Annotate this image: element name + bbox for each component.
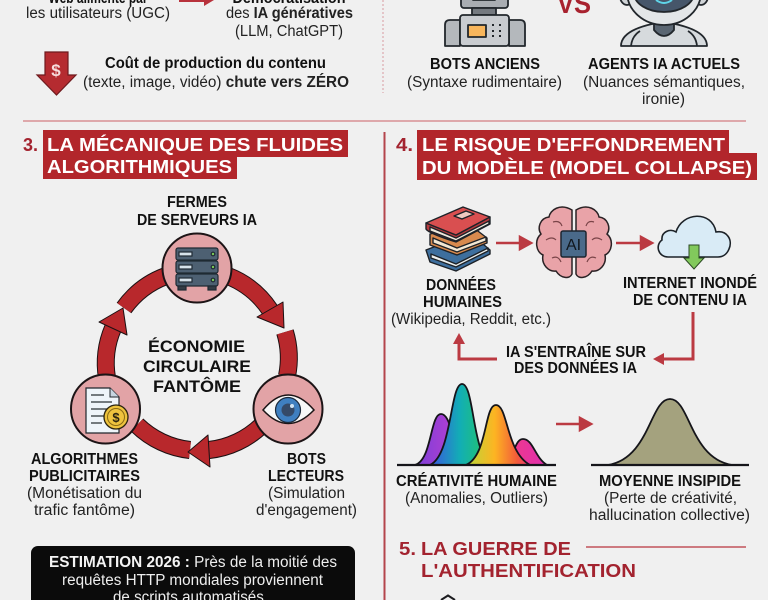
divider: horizontal: [23, 120, 746, 122]
arrow: books to brain: [496, 237, 531, 249]
label: human creativity: [396, 473, 557, 507]
label: server farms: FERMES: [167, 194, 227, 211]
label: training on AI data: IA S'ENTRAÎNE SUR: [506, 343, 646, 361]
label: ad algorithms: (Monétisation du: [27, 485, 142, 502]
label: reader bots: d'engagement): [256, 502, 357, 519]
heading: section 3: ALGORITHMIQUES: [47, 156, 232, 177]
icon: falling dollar arrow: $: [51, 61, 61, 80]
text: current agents: (Nuances sémantiques,: [583, 74, 745, 91]
icon: eye: [254, 374, 322, 444]
label: server farms: [137, 194, 257, 229]
heading: section 5: [399, 538, 746, 581]
text: generative AI: [226, 0, 353, 40]
arrow: training back to data: [453, 333, 497, 359]
label: ad algorithms: trafic fantôme): [34, 502, 135, 519]
text: current agents: AGENTS IA ACTUELS: [588, 56, 740, 73]
text: old bots: BOTS ANCIENS: [430, 56, 540, 73]
arrow: internet back to training: [653, 312, 693, 365]
heading: section 4: DU MODÈLE (MODEL COLLAPSE): [422, 157, 752, 178]
icon: servers: [162, 234, 232, 302]
label: human data: (Wikipedia, Reddit, etc.): [391, 311, 551, 328]
label: flooded internet: INTERNET INONDÉ: [623, 275, 757, 292]
text: ring centre: [143, 337, 251, 396]
icon: ad document and coin: $: [112, 410, 120, 425]
label: human data: DONNÉES: [426, 277, 496, 294]
callout: 2026 estimate: ESTIMATION 2026 : Près de la moitié des: [49, 554, 337, 571]
heading: section 5: LA GUERRE DE: [421, 538, 571, 559]
arrow: to generative AI: [179, 0, 214, 6]
panel: section 1 remainder: [26, 0, 353, 95]
label: human creativity: (Anomalies, Outliers): [405, 490, 548, 507]
label: bland mean: [589, 473, 750, 524]
text: ring centre: CIRCULAIRE: [143, 357, 251, 376]
label: human data: HUMAINES: [423, 294, 502, 311]
text: ring centre: FANTÔME: [153, 377, 241, 396]
icon: modern AI agent: [620, 0, 708, 46]
heading: section 5: 5.: [399, 538, 416, 559]
icon: old robot: [445, 0, 525, 46]
panel: section 5: [399, 538, 746, 600]
divider: vertical: [384, 132, 386, 600]
label: reader bots: (Simulation: [268, 485, 345, 502]
arrow: creativity to mean: [556, 418, 591, 430]
text: current agents: [583, 56, 745, 108]
label: training on AI data: [506, 343, 646, 377]
icon: ad document and coin: [71, 374, 140, 444]
panel: bots comparison: [407, 0, 745, 108]
label: ad algorithms: PUBLICITAIRES: [29, 468, 140, 485]
icon: stack of books: [426, 207, 490, 271]
text: user generated web: les utilisateurs (UGC): [26, 5, 170, 22]
heading: section 3: [23, 130, 348, 179]
label: training on AI data: DES DONNÉES IA: [514, 360, 637, 377]
text: production cost: Coût de production du contenu: [105, 55, 326, 72]
heading: section 4: [396, 130, 757, 180]
heading: section 4: LE RISQUE D'EFFONDREMENT: [422, 134, 726, 155]
icon: falling dollar arrow: [37, 52, 76, 95]
text: production cost: [83, 55, 349, 91]
text: old bots: [407, 56, 562, 91]
label: bland mean: hallucination collective): [589, 507, 750, 524]
divider: top panels: [382, 0, 384, 93]
panel: section 3: [23, 130, 357, 600]
text: current agents: ironie): [642, 91, 685, 108]
label: ad algorithms: ALGORITHMES: [31, 451, 138, 468]
chart: bland mean distribution: [591, 399, 749, 465]
label: bland mean: (Perte de créativité,: [604, 490, 737, 507]
callout: 2026 estimate: [31, 546, 355, 600]
heading: section 3: LA MÉCANIQUE DES FLUIDES: [47, 134, 343, 155]
label: reader bots: LECTEURS: [268, 468, 344, 485]
text: old bots: (Syntaxe rudimentaire): [407, 74, 562, 91]
diagram: circular economy ring: [99, 276, 289, 467]
label: ad algorithms: [27, 451, 142, 519]
icon: AI brain: [537, 207, 611, 277]
heading: section 4: 4.: [396, 134, 413, 155]
label: reader bots: BOTS: [287, 451, 326, 468]
label: flooded internet: [623, 275, 757, 309]
text: production cost: (texte, image, vidéo) chute vers ZÉRO: [83, 74, 349, 91]
text: generative AI: des IA génératives: [226, 5, 353, 22]
text: generative AI: (LLM, ChatGPT): [235, 23, 343, 40]
label: bland mean: MOYENNE INSIPIDE: [599, 473, 741, 490]
text: ring centre: ÉCONOMIE: [148, 337, 245, 356]
callout: 2026 estimate: requêtes HTTP mondiales proviennent: [62, 572, 324, 589]
label: human data: [391, 277, 551, 328]
label: reader bots: [256, 451, 357, 519]
chart: human creativity distribution: [397, 384, 556, 465]
panel: section 4: [391, 130, 757, 524]
label: human creativity: CRÉATIVITÉ HUMAINE: [396, 473, 557, 490]
icon: shield top: [441, 596, 455, 600]
label: server farms: DE SERVEURS IA: [137, 212, 257, 229]
label: flooded internet: DE CONTENU IA: [633, 292, 747, 309]
arrow: brain to cloud: [616, 237, 652, 249]
icon: cloud with green arrow: [658, 216, 730, 269]
heading: section 3: 3.: [23, 134, 38, 155]
icon: AI brain: AI: [566, 237, 581, 254]
heading: section 5: L'AUTHENTIFICATION: [421, 560, 636, 581]
